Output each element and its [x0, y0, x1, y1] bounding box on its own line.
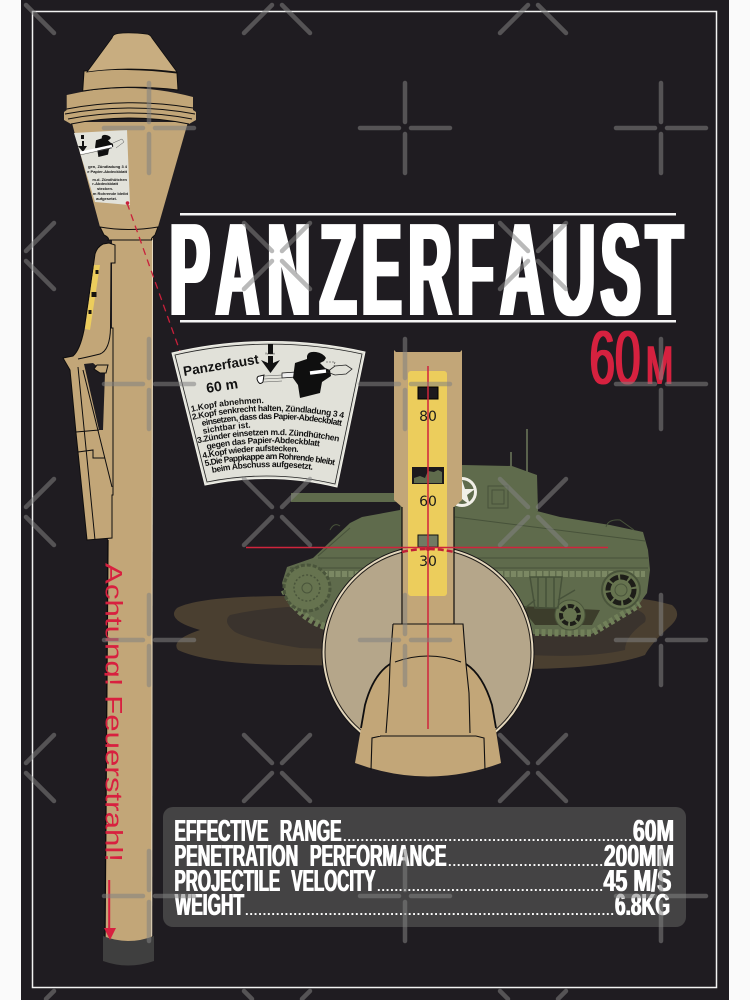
small instruction text: m.d. Zündhütchen [92, 177, 128, 182]
spec: projectile velocity: PROJECTILE VELOCITY [174, 864, 376, 898]
label instructions: 5.Die Pappkappe am Rohrende bleibt [204, 453, 336, 466]
sight leaf curve [78, 328, 110, 359]
small soldier icon [95, 135, 113, 157]
range number 80: 80 [419, 409, 437, 425]
front sprocket [284, 565, 330, 611]
small instruction text: m Rohrende bleibt [93, 191, 129, 196]
sight aperture disc [322, 546, 534, 758]
range number 30: 30 [419, 554, 437, 570]
folded rear sight [63, 243, 115, 540]
tank barrel [291, 493, 397, 502]
label instructions: gegen das Papier-Abdeckblatt [206, 436, 320, 451]
label instructions: beim Abschuss aufgesetzt. [212, 461, 312, 473]
road wheel [555, 600, 585, 630]
label model: 60 m [205, 375, 239, 396]
60 m window [412, 467, 444, 484]
spec: effective range: .................................................................. [343, 829, 632, 844]
label instructions: sichtbar ist. [203, 422, 250, 434]
spec: effective range [174, 814, 674, 848]
sight spring [94, 365, 108, 373]
spec: penetration performance: ................................... [448, 854, 603, 869]
red aiming crosshair [246, 366, 608, 729]
warhead second tier [83, 69, 178, 91]
warhead [64, 33, 196, 240]
spec: penetration performance: PENETRATION PERFORMANCE [174, 839, 446, 873]
warhead neck [100, 227, 158, 240]
yellow range strip [408, 371, 447, 596]
subtitle 60M: M [646, 334, 673, 396]
label warhead drawing [310, 362, 352, 375]
label warning arrow: Vorsicht [265, 352, 275, 356]
small instruction text: r-Abdeckblatt [92, 181, 119, 186]
sight strip [85, 265, 100, 330]
subtitle 60M: 60 [590, 316, 640, 401]
label warning arrow [261, 344, 280, 373]
lower hull shadow [520, 606, 600, 625]
warhead nose [87, 33, 177, 72]
sight cut-out [84, 363, 105, 430]
tank track [284, 590, 640, 633]
spec: effective range: 60M [633, 814, 674, 848]
sight lines [76, 367, 112, 540]
80 m window [418, 387, 438, 399]
small instruction text: aufgesetzt. [96, 196, 117, 201]
rear idler wheel [602, 571, 640, 609]
spec: weight [175, 888, 670, 922]
spec: weight: WEIGHT [175, 888, 244, 922]
shoulder and rear sight base [355, 624, 501, 776]
tank turret [400, 465, 538, 511]
small arrow icon [78, 135, 87, 152]
spec: weight: .................................................................................... [245, 903, 614, 918]
spec: penetration performance: 200MM [604, 839, 674, 873]
label instructions: einsetzen, dass das Papier-Abdeckblatt [202, 413, 342, 426]
white star [447, 477, 477, 507]
label instructions: 2.Kopf senkrecht halten, Zündladung 3 4 [192, 404, 344, 420]
tube end cap [103, 936, 154, 966]
warhead flange and rim [64, 88, 196, 124]
title rule top [180, 213, 676, 216]
suspension bogie [520, 577, 575, 612]
small weapon outline [80, 146, 112, 153]
tank [282, 429, 650, 635]
spec: weight: 6.8KG [615, 888, 670, 922]
warhead instruction label [74, 130, 130, 205]
tank hull [282, 510, 650, 635]
small instruction text: gen, Zündladung 3 4 [88, 164, 128, 169]
range number 60: 60 [419, 494, 437, 510]
label instructions [191, 398, 344, 473]
specifications panel [163, 807, 686, 927]
mud puddle under tank [174, 596, 677, 669]
iron sight blade [394, 350, 462, 624]
label instructions: 4.Kopf wieder aufstecken. [202, 444, 298, 458]
warhead ring lines [65, 103, 195, 124]
title: PANZERFAUST [170, 195, 683, 343]
small instruction text [87, 164, 129, 201]
dashed red leader line [126, 201, 184, 359]
label heading: Panzerfaust [182, 351, 260, 379]
panzerfaust launch tube [105, 238, 153, 942]
30 m window [418, 535, 438, 547]
tube warning arrow [104, 880, 116, 940]
warhead cone [72, 122, 188, 230]
small instruction text: e Papier-Abdeckblatt [87, 169, 128, 174]
hull details [290, 486, 648, 568]
label soldier silhouette [293, 352, 331, 398]
enlarged instruction label [171, 341, 366, 488]
title rule bottom [180, 320, 676, 322]
small instruction text: stecken. [97, 186, 113, 191]
spec: projectile velocity: 45 M/S [604, 864, 672, 898]
tank antenna [511, 429, 527, 472]
tube warning text: Achtung! Feuerstrahl! [100, 563, 126, 862]
spec: projectile velocity: .................................................... [377, 879, 603, 894]
spec: effective range: EFFECTIVE RANGE [174, 814, 342, 848]
label instructions: 3.Zünder einsetzen m.d. Zündhütchen [197, 429, 339, 443]
label weapon drawing [257, 371, 310, 383]
label instructions: 1.Kopf abnehmen. [191, 398, 264, 412]
